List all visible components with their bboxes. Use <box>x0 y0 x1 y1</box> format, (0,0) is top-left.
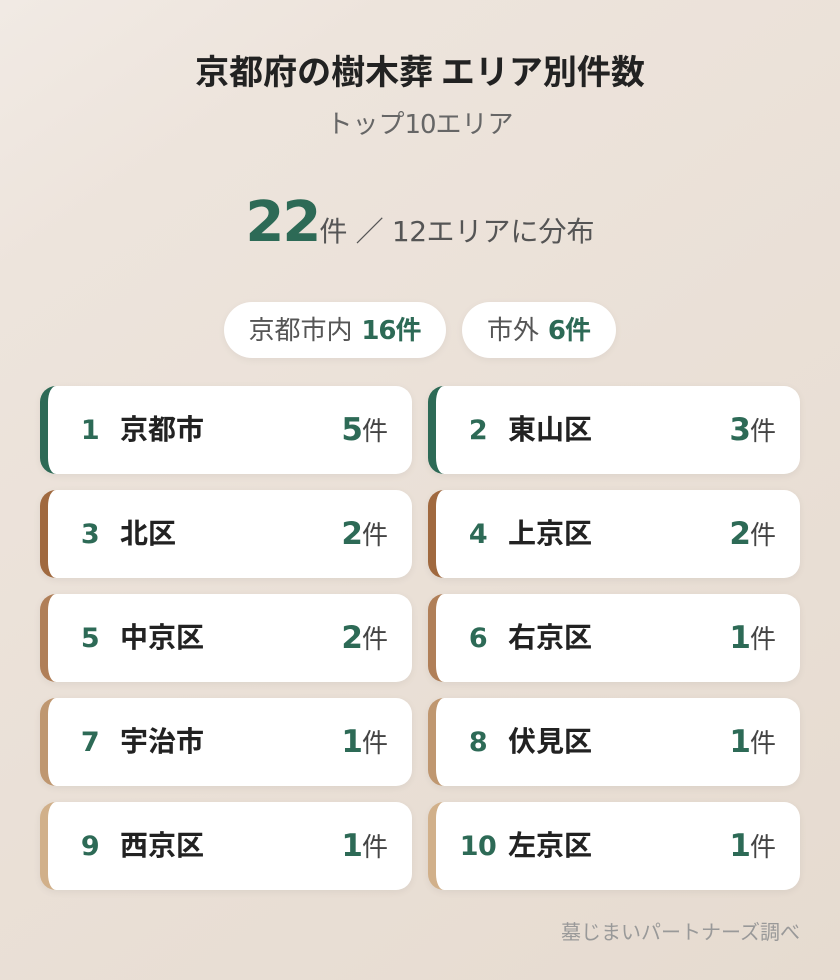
pill: Kyoto city: 京都市内 16件 <box>248 310 422 347</box>
card: rank 2: 東山区 <box>508 408 592 448</box>
card: rank 5: 中京区 <box>120 616 204 656</box>
subtitle: トップ10エリア <box>326 104 514 141</box>
card: rank 8: 伏見区 <box>508 720 592 760</box>
card: rank 3: 2件 <box>341 515 388 552</box>
card: rank 5: 2件 <box>341 619 388 656</box>
card: rank 5 <box>40 594 412 682</box>
card: rank 9: 1件 <box>341 827 388 864</box>
card: rank 10 <box>428 802 800 890</box>
card: rank 8: 1件 <box>729 723 776 760</box>
card: rank 5: 5 <box>81 623 99 654</box>
card: rank 7 <box>40 698 412 786</box>
card: rank 8: 8 <box>469 727 487 758</box>
card: rank 3 <box>40 490 412 578</box>
card: rank 9: 西京区 <box>120 824 204 864</box>
headline statistic: 22件 ／ 12エリアに分布 <box>245 190 595 255</box>
card: rank 6: 右京区 <box>508 616 592 656</box>
card: rank 4: 2件 <box>729 515 776 552</box>
card: rank 2: 3件 <box>729 411 776 448</box>
card: rank 10: 10 <box>460 831 496 862</box>
card: rank 4: 4 <box>469 519 487 550</box>
card: rank 2 <box>428 386 800 474</box>
card: rank 10: 左京区 <box>508 824 592 864</box>
card: rank 6 <box>428 594 800 682</box>
card: rank 6: 6 <box>469 623 487 654</box>
card: rank 7: 1件 <box>341 723 388 760</box>
card: rank 4: 上京区 <box>508 512 592 552</box>
card: rank 10: 1件 <box>729 827 776 864</box>
card: rank 3: 北区 <box>120 512 176 552</box>
card: rank 1: 5件 <box>341 411 388 448</box>
card: rank 6: 1件 <box>729 619 776 656</box>
card: rank 3: 3 <box>81 519 99 550</box>
title: 京都府の樹木葬 エリア別件数 <box>195 45 645 94</box>
card: rank 8 <box>428 698 800 786</box>
pill: outside city <box>462 302 616 358</box>
card: rank 1 <box>40 386 412 474</box>
pill: outside city: 市外 6件 <box>487 310 591 347</box>
pill: Kyoto city <box>224 302 446 358</box>
card: rank 9: 9 <box>81 831 99 862</box>
card: rank 1: 京都市 <box>120 408 204 448</box>
card: rank 9 <box>40 802 412 890</box>
card: rank 1: 1 <box>81 415 99 446</box>
card: rank 4 <box>428 490 800 578</box>
card: rank 7: 宇治市 <box>120 720 204 760</box>
card: rank 2: 2 <box>469 415 487 446</box>
source note: 墓じまいパートナーズ調べ <box>561 916 800 945</box>
card: rank 7: 7 <box>81 727 99 758</box>
